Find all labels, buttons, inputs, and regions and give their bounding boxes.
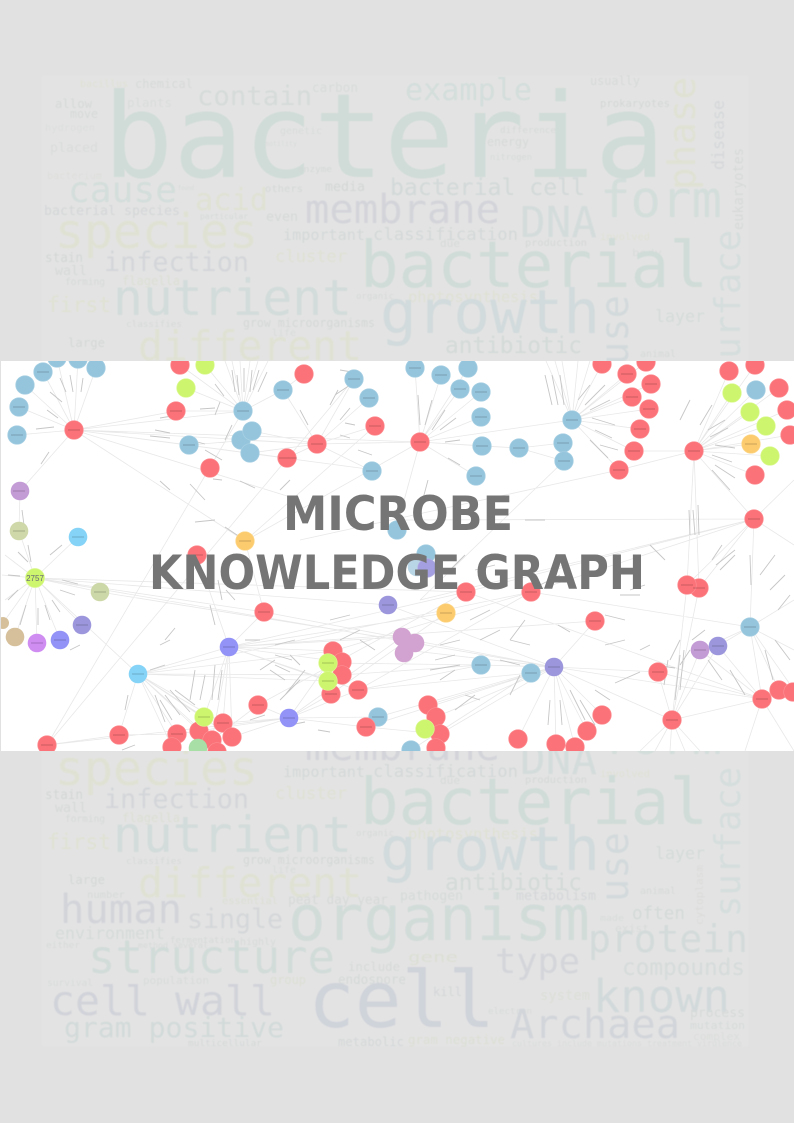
word cloud: lower part: stain [45,788,83,803]
word cloud: lower part: use [593,832,638,902]
word cloud: lower part: wall [55,801,87,816]
word cloud: upper part: form [600,171,722,230]
word cloud: upper part: bacterial cell [390,175,585,201]
word cloud: upper part: DNA [520,198,597,248]
word cloud: lower part: peat day year [288,893,388,908]
word cloud: upper part: stain [45,251,83,266]
word cloud: upper part: surface [708,230,749,380]
word cloud: lower part: bacterial [360,766,708,840]
word cloud: lower part: organic [356,829,394,839]
nodes: blue [8,349,765,759]
word cloud: lower part: growth [380,814,600,885]
word cloud: lower part: first [47,830,111,854]
title [149,487,645,601]
word cloud: upper part: grow microorganisms [243,316,375,330]
word cloud: upper part: plants [127,96,172,110]
word cloud: upper part: bacillus [80,79,128,90]
panel: knowledge graph band [0,349,794,761]
word cloud: upper part: classification [373,225,518,245]
word cloud: lower part: population [143,974,209,987]
word cloud: lower part: species [55,741,258,797]
word cloud: upper part: large [68,336,105,350]
word cloud: lower part: often [632,903,685,924]
word cloud: upper part: motility [265,140,297,148]
word cloud: lower part: involved [600,769,650,780]
word cloud: upper part: eukaryotes [731,148,747,230]
word cloud: lower part: classification [373,762,518,782]
word cloud: lower part: DNA [520,735,597,785]
word cloud: lower part: gram negative [408,1033,505,1047]
word cloud: upper part: different [138,322,362,370]
word cloud: lower part: human [60,887,182,933]
word cloud: upper part: carbon [312,81,358,96]
word cloud: lower part: cultures include mutations treatment virulence [512,1039,742,1048]
nodes: orange [236,435,760,622]
word cloud: upper part: photosynthesis [408,288,538,306]
word cloud: upper part: move [70,107,98,121]
word cloud: upper part: placed [50,141,98,156]
word cloud: upper part: infection [104,247,249,278]
word cloud: lower part: nutrient [113,806,352,864]
word cloud: upper part: contain [197,81,312,112]
word cloud: lower part: type [495,942,580,982]
word cloud: upper part: use [593,295,638,365]
word cloud: upper part: important [283,226,365,244]
word cloud: upper part: first [47,293,111,317]
word cloud: lower part: environment [55,924,165,944]
word cloud: lower part: endospore [338,973,406,988]
nodes: red [38,353,794,761]
word cloud: lower part: cytoplasm [693,865,706,925]
word cloud: upper part: genetic [280,126,322,137]
word cloud: lower part: production [525,775,587,786]
word cloud: lower part: important [283,763,365,781]
word cloud: lower part: mutation [690,1019,745,1032]
word cloud: lower part: cell wall [50,977,275,1025]
nodes: purple, pink, periwinkle and other categories [0,482,727,757]
word cloud: upper part: particular [200,212,248,221]
word cloud: lower part: large [68,873,105,887]
word cloud: lower part: gram positive [64,1011,284,1044]
nodes: pale blue and periwinkle cluster [408,558,436,577]
word cloud: upper part: nitrogen [490,153,532,163]
word cloud: upper part: energy [487,135,529,149]
word cloud: lower part: compounds [622,955,745,981]
word cloud: lower part: cluster [275,784,347,804]
word cloud: upper part: acid [195,183,268,218]
word cloud: upper part: cluster [275,247,347,267]
word cloud: lower part: structure [88,930,335,984]
word cloud: upper part: growth [380,277,600,348]
word cloud: upper part: forming [65,277,105,288]
word cloud: upper part: wall [55,264,87,279]
word cloud: upper part: example [405,73,532,108]
word cloud: lower part: Archaea [510,1002,680,1048]
word cloud: lower part: highly [240,937,276,948]
word cloud: lower part: different [138,859,362,907]
word cloud: lower part [42,708,749,1049]
word cloud: upper part: usually [590,74,640,88]
word cloud: lower part: forming [65,814,105,825]
word cloud: lower part: animal [640,886,676,897]
word cloud: upper part: species [55,204,258,260]
word cloud: upper part: others [265,184,303,195]
node value label: 2757 [26,574,44,583]
nodes: lime [26,356,779,738]
word cloud: lower part: due [440,774,460,787]
word cloud: lower part: photosynthesis [408,825,538,843]
word cloud: lower part: complex [693,1030,740,1043]
edge labels [8,368,790,750]
word cloud: lower part: organism [288,882,590,955]
word cloud: upper part: cause [68,170,177,211]
word cloud: lower part: electron [488,1007,532,1017]
word cloud: upper part: even [266,210,298,225]
rotated words: phase [661,77,704,190]
word cloud: upper part: involved [600,232,650,243]
word cloud: lower part: exist [615,922,649,935]
word cloud: upper part: antibiotic [445,333,582,359]
word cloud: upper part: organic [356,292,394,302]
word cloud: lower part: flagella [122,811,180,825]
word cloud: lower part: either [46,941,81,951]
word cloud: lower part: infection [104,784,249,815]
word cloud: upper part: hydrogen [45,123,95,134]
word cloud: lower part: gene [408,950,458,966]
word cloud: lower part: protein [588,917,748,961]
word cloud: upper part: chemical [135,77,193,91]
word cloud: lower part: cell [308,956,495,1046]
word cloud: lower part: single [187,904,283,935]
word cloud: lower part: antibiotic [445,870,582,896]
word cloud: upper part: allow [55,97,93,111]
word cloud: lower part: made [600,914,624,924]
word cloud: upper part: layer [655,307,705,327]
word cloud: lower part: process [690,1006,745,1021]
word cloud: upper part: membrane [305,187,500,233]
word cloud: lower part: pathogen [400,889,463,904]
word cloud: upper part [42,68,749,380]
title: MICROBE [283,487,513,542]
word cloud: lower part: fermentation [170,936,236,946]
word cloud: lower part: metabolism [516,889,596,904]
word cloud: lower part: include [348,960,400,974]
word cloud: upper part: enzyme [298,165,332,175]
word cloud: lower part: form [600,708,722,767]
word cloud: upper part: bacterium [47,171,102,182]
word cloud: upper part: media [325,180,365,195]
word cloud: upper part: classifies [126,320,182,330]
word cloud: lower part: system [540,988,590,1004]
word cloud: lower part: kill [433,985,462,999]
word cloud: lower part: grow microorganisms [243,853,375,867]
word cloud: upper part: production [525,238,587,249]
word cloud: upper part: disease [709,100,729,170]
word cloud: lower part: layer [655,844,705,864]
word cloud: upper part: bacterial species [44,204,180,219]
word cloud: upper part: life [272,328,296,339]
node captions [11,368,768,745]
word cloud: lower part: survival [47,978,93,989]
word cloud: lower part: multicellular [188,1039,263,1049]
word cloud: upper part: difference [500,126,556,136]
word cloud: upper part: prokaryotes [600,97,670,110]
word cloud: upper part: body [632,248,662,259]
word cloud: lower part: group [270,973,306,987]
word cloud: lower part: known [593,970,730,1023]
word cloud: lower part: method several [138,941,208,950]
word cloud: upper part: flagella [122,274,180,288]
word cloud: upper part: nutrient [113,269,352,327]
word cloud: upper part: bacterial [360,229,708,303]
word cloud: lower part: surface [708,767,749,917]
word cloud: upper part: animal [640,349,676,360]
word cloud: lower part: essential [222,896,278,907]
title: KNOWLEDGE GRAPH [149,546,645,601]
word cloud: upper part: due [440,237,460,250]
word cloud: lower part: number [87,890,125,901]
word cloud: lower part: life [272,865,296,876]
word cloud: lower part: classifies [126,857,182,867]
word cloud: lower part: metabolic [338,1035,404,1049]
word cloud: upper part: bacteria [103,68,665,205]
word cloud: upper part: found [178,185,194,192]
graph edges [2,358,794,751]
word cloud: lower part: membrane [305,724,500,770]
